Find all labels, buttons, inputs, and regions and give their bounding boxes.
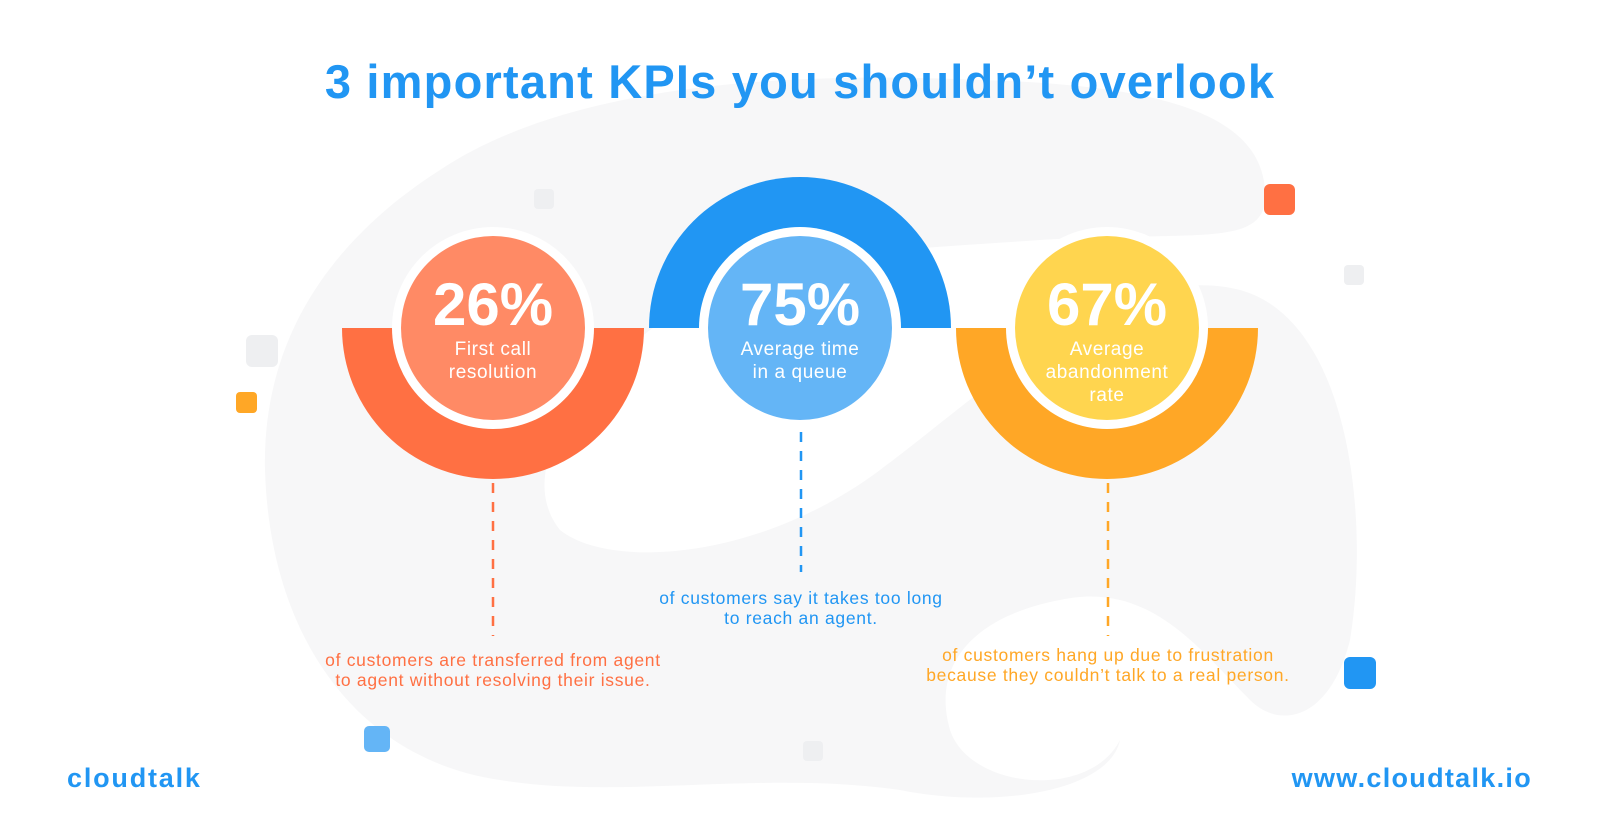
- title: 3 important KPIs you shouldn’t overlook: [325, 55, 1275, 108]
- website: www.cloudtalk.io: [1291, 763, 1532, 793]
- kpi 2: 75%: [740, 271, 860, 338]
- kpi 3: abandonment: [1046, 362, 1169, 383]
- kpi 3: because they couldn’t talk to a real person.: [926, 665, 1290, 685]
- kpi 1: 26%: [433, 271, 553, 338]
- kpi 3: Average: [1070, 339, 1144, 360]
- kpi 1: of customers are transferred from agent: [325, 650, 661, 670]
- kpi 2: to reach an agent.: [724, 608, 878, 628]
- kpi 2: Average time: [741, 339, 859, 360]
- kpi 1: to agent without resolving their issue.: [335, 670, 651, 690]
- kpi 2: of customers say it takes too long: [659, 588, 943, 608]
- kpi 1: [325, 227, 661, 690]
- kpi 1: resolution: [449, 362, 537, 383]
- decorative squares: [236, 184, 1376, 761]
- kpi 2: [649, 177, 951, 628]
- kpi 1: First call: [455, 339, 531, 360]
- kpi 3: rate: [1089, 385, 1125, 406]
- kpi 3: [926, 227, 1290, 685]
- kpi 2: in a queue: [753, 362, 847, 383]
- kpi 3: of customers hang up due to frustration: [942, 645, 1274, 665]
- logo: cloudtalk: [67, 763, 202, 793]
- background blob: [265, 78, 1357, 798]
- kpi 3: 67%: [1047, 271, 1167, 338]
